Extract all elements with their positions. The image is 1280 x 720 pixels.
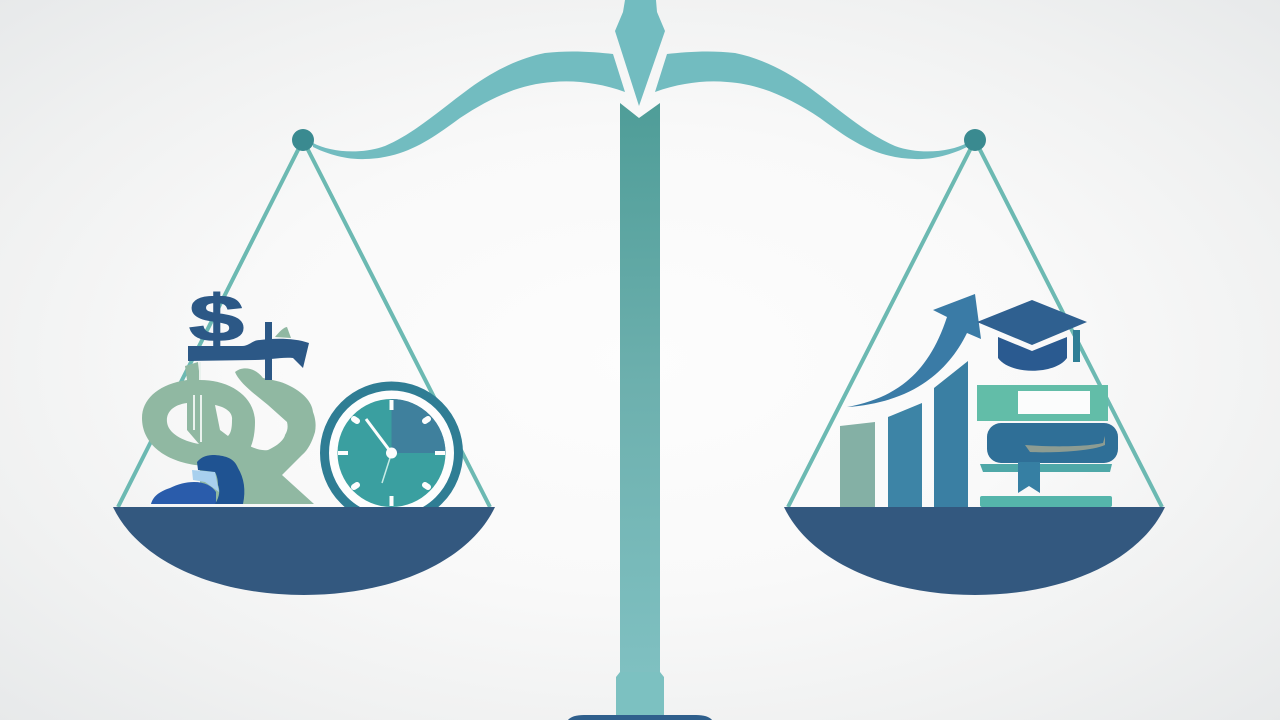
pillar foot <box>616 672 664 716</box>
left pivot <box>292 129 314 151</box>
icon: blue coin pile <box>151 455 244 504</box>
finial <box>615 0 665 106</box>
bar 1 <box>840 422 875 507</box>
left pan strings <box>118 140 490 507</box>
cap tassel <box>1073 330 1080 362</box>
top book <box>977 385 1108 421</box>
dollar ring <box>142 362 255 468</box>
clock second hand <box>382 458 390 483</box>
right pan strings <box>788 140 1162 507</box>
right pan dish <box>784 507 1165 595</box>
right arm <box>655 51 967 159</box>
icon: green dollar signs <box>142 327 316 504</box>
left pan <box>113 129 495 595</box>
pillar <box>620 103 660 672</box>
cap board <box>977 300 1087 345</box>
base <box>568 715 712 720</box>
currency stroke <box>265 322 272 380</box>
icon: clock <box>324 386 458 520</box>
small leaf <box>275 327 291 338</box>
icon: growth arrow <box>847 294 981 407</box>
scale stand <box>568 103 712 720</box>
right pan <box>784 129 1165 595</box>
bar 2 <box>888 403 922 507</box>
beam <box>313 0 967 159</box>
book label <box>1018 391 1090 414</box>
highlight <box>192 470 219 492</box>
icon: navy dollar symbol: $ <box>189 281 244 355</box>
clock centre <box>386 448 397 458</box>
left pan dish <box>113 507 495 595</box>
middle book <box>987 423 1118 463</box>
ribbon <box>1018 462 1040 493</box>
coin pile base <box>151 482 216 504</box>
clock hands <box>366 419 392 453</box>
left arm <box>313 51 625 159</box>
icon: bar chart <box>840 361 968 507</box>
dollar curve <box>200 368 316 504</box>
bottom book <box>980 496 1112 507</box>
clock case <box>324 386 458 520</box>
bar 3 <box>934 361 968 507</box>
clock face <box>338 399 446 507</box>
currency bar <box>188 339 309 368</box>
coin pile top <box>197 455 244 504</box>
cap base <box>998 337 1067 371</box>
right pivot <box>964 129 986 151</box>
clock ticks <box>338 400 445 506</box>
dollar stem highlights <box>194 362 201 442</box>
book streak <box>1025 436 1105 452</box>
clock quadrant <box>392 399 446 453</box>
thin book <box>980 464 1112 472</box>
icon: stacked books <box>977 385 1118 507</box>
icon: graduation cap <box>977 300 1087 371</box>
